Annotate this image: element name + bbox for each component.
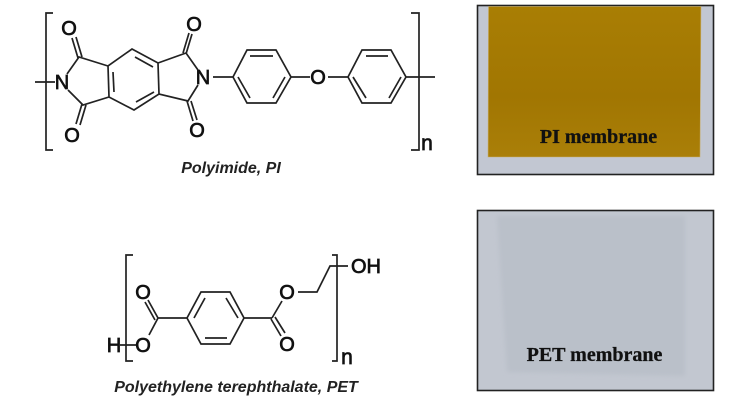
- phenyl ring 2: [348, 50, 435, 103]
- atom labels PET: n: [341, 346, 353, 369]
- atom labels PET: O: [279, 334, 295, 356]
- caption: polyimide: Polyimide, PI: [181, 160, 281, 177]
- atom labels PET: O: [135, 335, 151, 357]
- photo: PI membrane: PI membrane: [540, 126, 657, 148]
- phenyl ring 1: [233, 50, 291, 103]
- left bracket PET: [126, 255, 133, 361]
- atom labels PI: [55, 14, 433, 155]
- atom labels PI: n: [421, 132, 433, 155]
- atom labels PI: N: [55, 72, 69, 94]
- photo: PI membrane: [478, 6, 714, 174]
- panel: PET structure: [120, 255, 348, 361]
- atom labels PI: O: [64, 125, 80, 147]
- photo: PET membrane: [478, 210, 714, 390]
- ether link: [291, 76, 348, 78]
- atom labels PI: O: [189, 120, 205, 142]
- dianhydride core: [35, 33, 233, 125]
- atom labels PET: [107, 256, 381, 369]
- atom labels PI: O: [61, 18, 77, 40]
- photo: PET membrane: PET membrane: [527, 344, 662, 366]
- terephthalate skeleton: [120, 266, 348, 345]
- right bracket PET: [332, 255, 337, 361]
- atom labels PET: OH: [351, 256, 381, 278]
- caption: PET: Polyethylene terephthalate, PET: [114, 379, 359, 396]
- left bracket PI: [46, 13, 53, 150]
- atom labels PET: O: [279, 282, 295, 304]
- atom labels PI: O: [186, 14, 202, 36]
- atom labels PET: H: [107, 335, 121, 357]
- right bracket PI: [411, 13, 419, 150]
- atom labels PET: O: [135, 282, 151, 304]
- panel: polyimide structure: [35, 13, 435, 150]
- atom labels PI: O: [310, 67, 326, 89]
- atom labels PI: N: [196, 67, 210, 89]
